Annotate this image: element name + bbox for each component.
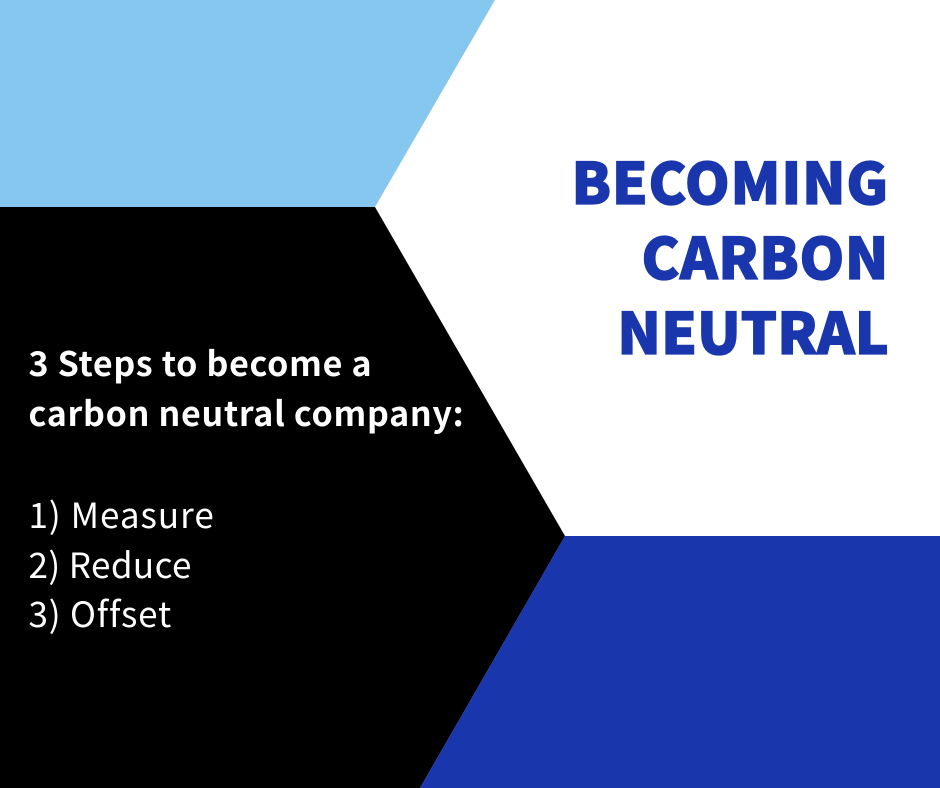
panel: light blue top-left [0,0,495,207]
subheading [28,337,464,436]
steps list: 3) Offset [28,587,172,638]
title: CARBON [641,214,889,296]
title: BECOMING [571,139,889,221]
steps list [28,488,215,638]
title [571,139,889,371]
subheading: 3 Steps to become a [28,337,372,386]
subheading: carbon neutral company: [28,387,464,436]
steps list: 2) Reduce [28,538,192,589]
panel: dark blue bottom-right [420,536,940,788]
steps list: 1) Measure [28,488,215,539]
panel: black hexagon [0,207,565,788]
title: NEUTRAL [617,289,889,371]
